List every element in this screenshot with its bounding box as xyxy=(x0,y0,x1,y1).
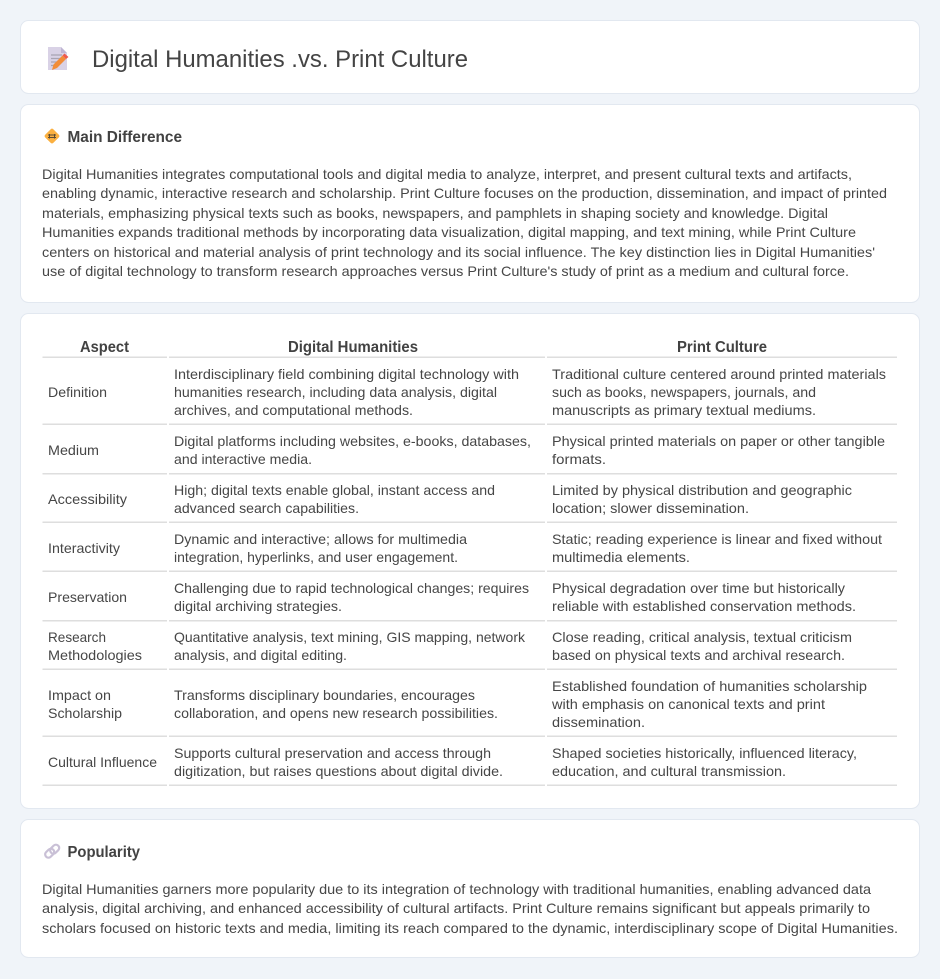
table row: definition: Traditional culture centered around printed materials xyxy=(552,366,886,382)
table row: medium: and interactive media. xyxy=(174,451,312,467)
table row: interactivity: integration, hyperlinks, and user engagement. xyxy=(174,549,458,565)
table row: cultural influence: education, and cultural transmission. xyxy=(552,763,786,779)
text block: popularity paragraph: analysis, digital archiving, and enhanced accessibility of cultural artifacts. Print Culture remains significant but appeals primarily to xyxy=(42,900,870,916)
table header row: Print Culture xyxy=(677,339,767,356)
text block: main difference paragraph: Digital Humanities integrates computational tools and digital media to analyze, interpret, and present cultural texts and artifacts, xyxy=(42,166,852,182)
table row: accessibility: Limited by physical distribution and geographic xyxy=(552,482,852,498)
panel: main difference xyxy=(20,104,920,302)
table row: research methodologies: Methodologies xyxy=(48,647,142,663)
icon: document with pencil xyxy=(48,47,68,70)
heading: popularity: Popularity xyxy=(68,844,140,861)
table row: research methodologies: Quantitative analysis, text mining, GIS mapping, network xyxy=(174,629,526,645)
text block: main difference paragraph: centers on historical and material analysis of print technology and its social influence. The key distinction lies in Digital Humanities' xyxy=(42,244,875,260)
text block: main difference paragraph xyxy=(42,166,887,279)
table row: definition xyxy=(42,366,897,425)
text block: main difference paragraph: Humanities expands traditional methods by incorporating data visualization, digital mapping, and text mining, while Print Culture xyxy=(42,224,856,240)
table row: research methodologies: Close reading, critical analysis, textual criticism xyxy=(552,629,852,645)
table row: preservation xyxy=(42,580,897,622)
heading: main difference: Main Difference xyxy=(68,129,182,146)
table row: impact on scholarship: dissemination. xyxy=(552,714,645,730)
table row: preservation: digital archiving strategies. xyxy=(174,598,342,614)
table row: medium: Digital platforms including websites, e-books, databases, xyxy=(174,433,531,449)
text block: main difference paragraph: materials, emphasizing physical texts such as books, newspapers, and pamphlets in shaping society and knowledge. Digital xyxy=(42,205,828,221)
icon: orange diamond sign xyxy=(44,128,60,144)
table row: impact on scholarship: collaboration, and opens new research possibilities. xyxy=(174,705,498,721)
table row: definition: Interdisciplinary field combining digital technology with xyxy=(174,366,519,382)
table row: cultural influence: digitization, but raises questions about digital divide. xyxy=(174,763,503,779)
text block: main difference paragraph: use of digital technology to transform research approaches versus Print Culture's study of print as a medium and cultural force. xyxy=(42,263,849,279)
text block: popularity paragraph: scholars focused on historic texts and media, limiting its reach compared to the dynamic, interdisciplinary scope of Digital Humanities. xyxy=(42,920,898,936)
table row: impact on scholarship: Transforms disciplinary boundaries, encourages xyxy=(174,687,475,703)
table row: preservation: reliable with established conservation methods. xyxy=(552,598,856,614)
table row: accessibility: High; digital texts enable global, instant access and xyxy=(174,482,495,498)
text block: popularity paragraph: Digital Humanities garners more popularity due to its integration of technology with traditional humanities, enabling advanced data xyxy=(42,881,871,897)
text block: main difference paragraph: enabling dynamic, interactive research and scholarship. Print Culture focuses on the production, dissemination, and impact of printed xyxy=(42,185,887,201)
table row: definition: such as books, newspapers, journals, and xyxy=(552,384,816,400)
table row: definition: humanities research, including data analysis, digital xyxy=(174,384,497,400)
table row: impact on scholarship: Impact on xyxy=(48,687,111,703)
icon: chain link xyxy=(44,843,61,859)
table row: impact on scholarship: with emphasis on canonical texts and print xyxy=(551,696,825,712)
table row: medium: Physical printed materials on paper or other tangible xyxy=(552,433,885,449)
table row: cultural influence: Cultural Influence xyxy=(48,754,157,770)
table row: research methodologies xyxy=(42,629,897,670)
table header row: Aspect xyxy=(80,339,130,356)
text block: popularity paragraph xyxy=(42,881,898,936)
table row: medium xyxy=(42,433,897,474)
table row: research methodologies: Research xyxy=(48,629,106,645)
table header row xyxy=(42,339,897,358)
table row: accessibility: Accessibility xyxy=(48,491,127,507)
table row: interactivity: Interactivity xyxy=(48,540,120,556)
table row: interactivity xyxy=(42,531,897,572)
table row: medium: formats. xyxy=(552,451,606,467)
panel: comparison table xyxy=(20,314,920,808)
table row: impact on scholarship: Scholarship xyxy=(48,705,122,721)
table row: preservation: Preservation xyxy=(48,589,127,605)
table row: preservation: Physical degradation over time but historically xyxy=(552,580,845,596)
panel: popularity xyxy=(20,820,920,958)
table row: definition: manuscripts as primary textual mediums. xyxy=(552,402,816,418)
table row: interactivity: Dynamic and interactive; allows for multimedia xyxy=(174,531,467,547)
table row: preservation: Challenging due to rapid technological changes; requires xyxy=(174,580,529,596)
table row: definition: Definition xyxy=(48,384,107,400)
table row: definition: archives, and computational methods. xyxy=(174,402,413,418)
table row: interactivity: Static; reading experience is linear and fixed without xyxy=(552,531,882,547)
table row: cultural influence xyxy=(42,745,897,786)
title: Digital Humanities .vs. Print Culture xyxy=(92,46,468,73)
table row: interactivity: multimedia elements. xyxy=(552,549,690,565)
table row: research methodologies: analysis, and digital editing. xyxy=(174,647,347,663)
table row: accessibility xyxy=(42,482,897,523)
table row: cultural influence: Supports cultural preservation and access through xyxy=(174,745,491,761)
table row: accessibility: advanced search capabilities. xyxy=(174,500,359,516)
table row: research methodologies: based on physical texts and archival research. xyxy=(552,647,845,663)
table row: accessibility: location; slower dissemination. xyxy=(552,500,749,516)
table row: medium: Medium xyxy=(48,442,99,458)
table row: impact on scholarship xyxy=(42,678,897,737)
table row: impact on scholarship: Established foundation of humanities scholarship xyxy=(552,678,867,694)
table header row: Digital Humanities xyxy=(288,339,418,356)
table row: cultural influence: Shaped societies historically, influenced literacy, xyxy=(552,745,857,761)
panel: title header xyxy=(20,20,920,94)
